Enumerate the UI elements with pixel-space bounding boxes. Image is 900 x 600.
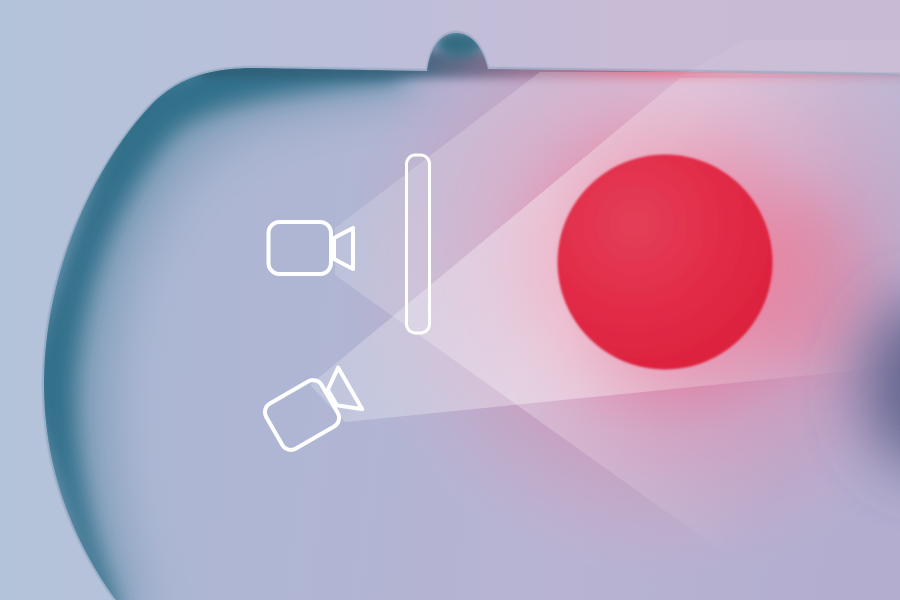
vertical glass barrier	[406, 155, 430, 333]
tray floor	[104, 78, 900, 600]
soft outer falloff of left wall shadow	[54, 77, 432, 600]
top wall shadow	[200, 50, 900, 78]
icon: upper video camera	[268, 222, 353, 274]
camera light beam one	[335, 72, 900, 502]
icon: lower video camera	[261, 365, 363, 454]
red sphere	[558, 154, 772, 370]
dark left wall shadow	[20, 50, 400, 600]
dark cast shadow at right	[865, 300, 900, 470]
red glow around the ball	[416, 36, 900, 520]
faint beam above the tray	[680, 40, 900, 76]
red glow spill right of the ball	[766, 196, 866, 370]
camera light beam two	[310, 78, 822, 422]
notch shadow	[436, 30, 484, 58]
